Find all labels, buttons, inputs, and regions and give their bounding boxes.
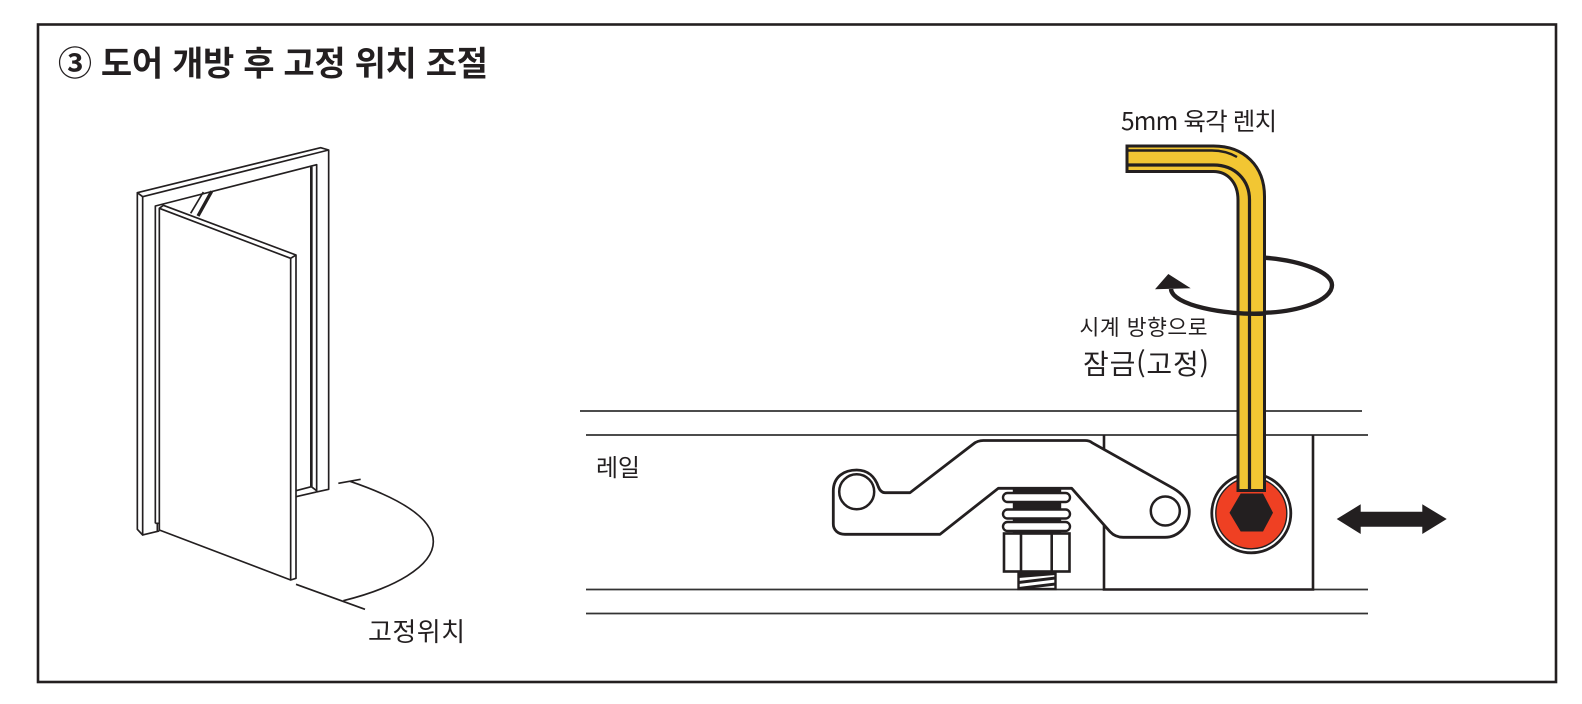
bolt head	[1212, 474, 1291, 553]
double arrow	[1337, 504, 1447, 534]
lever pivot right	[1151, 496, 1180, 526]
door leaf	[159, 205, 296, 580]
sliding block	[1104, 435, 1313, 590]
hex wrench	[1127, 146, 1264, 490]
rotation arrow: front part	[1155, 274, 1264, 314]
rotation arrow: back part	[1255, 258, 1332, 313]
door leaf edge	[159, 208, 296, 580]
label: rail: 레일	[596, 448, 640, 483]
lever pivot left	[839, 474, 874, 509]
label: fixed position: 고정위치	[368, 612, 465, 649]
lever arm	[833, 440, 1189, 537]
threaded bolt	[1018, 572, 1056, 589]
nut	[1004, 534, 1070, 572]
title: ③ 도어 개방 후 고정 위치 조절	[58, 36, 488, 86]
swing arc	[296, 479, 433, 609]
spring and washers	[1003, 489, 1070, 533]
label: lock: 잠금(고정)	[1083, 343, 1209, 383]
closer arm	[191, 191, 212, 216]
door frame	[137, 148, 329, 535]
label: wrench size: 5mm 육각 렌치	[1121, 103, 1277, 138]
rail lines	[580, 411, 1368, 614]
door illustration	[137, 148, 433, 609]
label: clockwise: 시계 방향으로	[1080, 311, 1208, 342]
